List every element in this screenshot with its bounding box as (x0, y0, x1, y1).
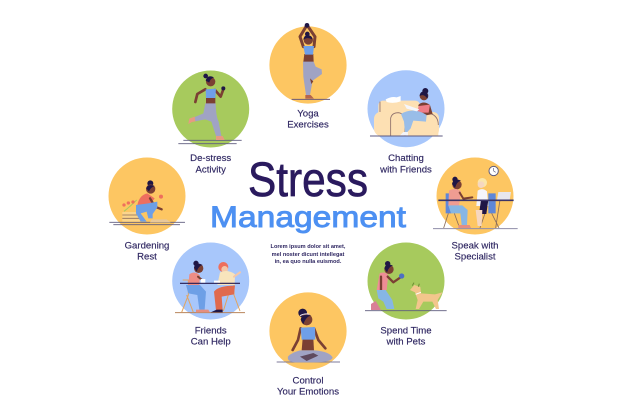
circle: specialist background (436, 158, 514, 234)
step: Spend Time with Pets (365, 242, 447, 320)
label: Control Your Emotions: Control (293, 376, 323, 386)
label: Gardening Rest: Gardening (125, 240, 169, 252)
label: Speak with Specialist: Speak with (452, 240, 498, 252)
icon: meditating woman (277, 309, 340, 362)
label: De-stress Activity: De-stress (190, 153, 231, 164)
title: Management: Management (210, 201, 407, 234)
icon: two friends at table (175, 261, 245, 313)
circle: friends background (172, 242, 249, 320)
body text: lorem ipsum: Lorem ipsum dolor sit amet, (271, 244, 346, 250)
label: Friends Can Help: Friends (195, 326, 227, 336)
step: Friends Can Help (172, 242, 249, 320)
icon: meeting at desk (433, 166, 518, 229)
step: Yoga Exercises (269, 23, 347, 104)
circle: meditation background (269, 292, 347, 370)
step: Speak with Specialist (433, 158, 518, 234)
circle: pets background (368, 242, 444, 320)
title: Stress: Stress (248, 154, 368, 207)
label: Chatting with Friends: Chatting (388, 153, 424, 164)
circle: gardening background (108, 158, 186, 234)
icon: woman on sofa with cat (370, 88, 443, 136)
circle: yoga background (269, 26, 347, 104)
body text: lorem ipsum (271, 244, 346, 265)
icon: woman kneeling with dog (365, 261, 447, 311)
body text: lorem ipsum: in, ea quo nulla euismod. (275, 259, 342, 265)
step: Gardening Rest (108, 158, 186, 234)
step: Control Your Emotions (269, 292, 347, 370)
icon: running woman (178, 74, 242, 144)
step: Chatting with Friends (368, 70, 444, 147)
icon: yoga figure (292, 23, 330, 99)
label: Gardening Rest: Rest (137, 252, 157, 262)
labels (125, 108, 498, 398)
label: Spend Time with Pets: Spend Time (380, 326, 432, 336)
label: Speak with Specialist: Specialist (454, 252, 496, 262)
circle: de-stress background (172, 70, 249, 148)
circle: chatting background (368, 70, 444, 147)
label: Chatting with Friends: with Friends (379, 164, 432, 176)
label: Yoga Exercises: Exercises (287, 120, 329, 130)
step: De-stress Activity (172, 70, 249, 148)
label: Friends Can Help: Can Help (191, 336, 231, 348)
icon: woman gardening (109, 180, 185, 225)
label: Spend Time with Pets: with Pets (386, 336, 426, 348)
body text: lorem ipsum: mel noster dicunt intellegat (272, 252, 344, 258)
label: Control Your Emotions: Your Emotions (277, 386, 339, 398)
label: De-stress Activity: Activity (196, 164, 226, 176)
label: Yoga Exercises: Yoga (297, 108, 319, 120)
